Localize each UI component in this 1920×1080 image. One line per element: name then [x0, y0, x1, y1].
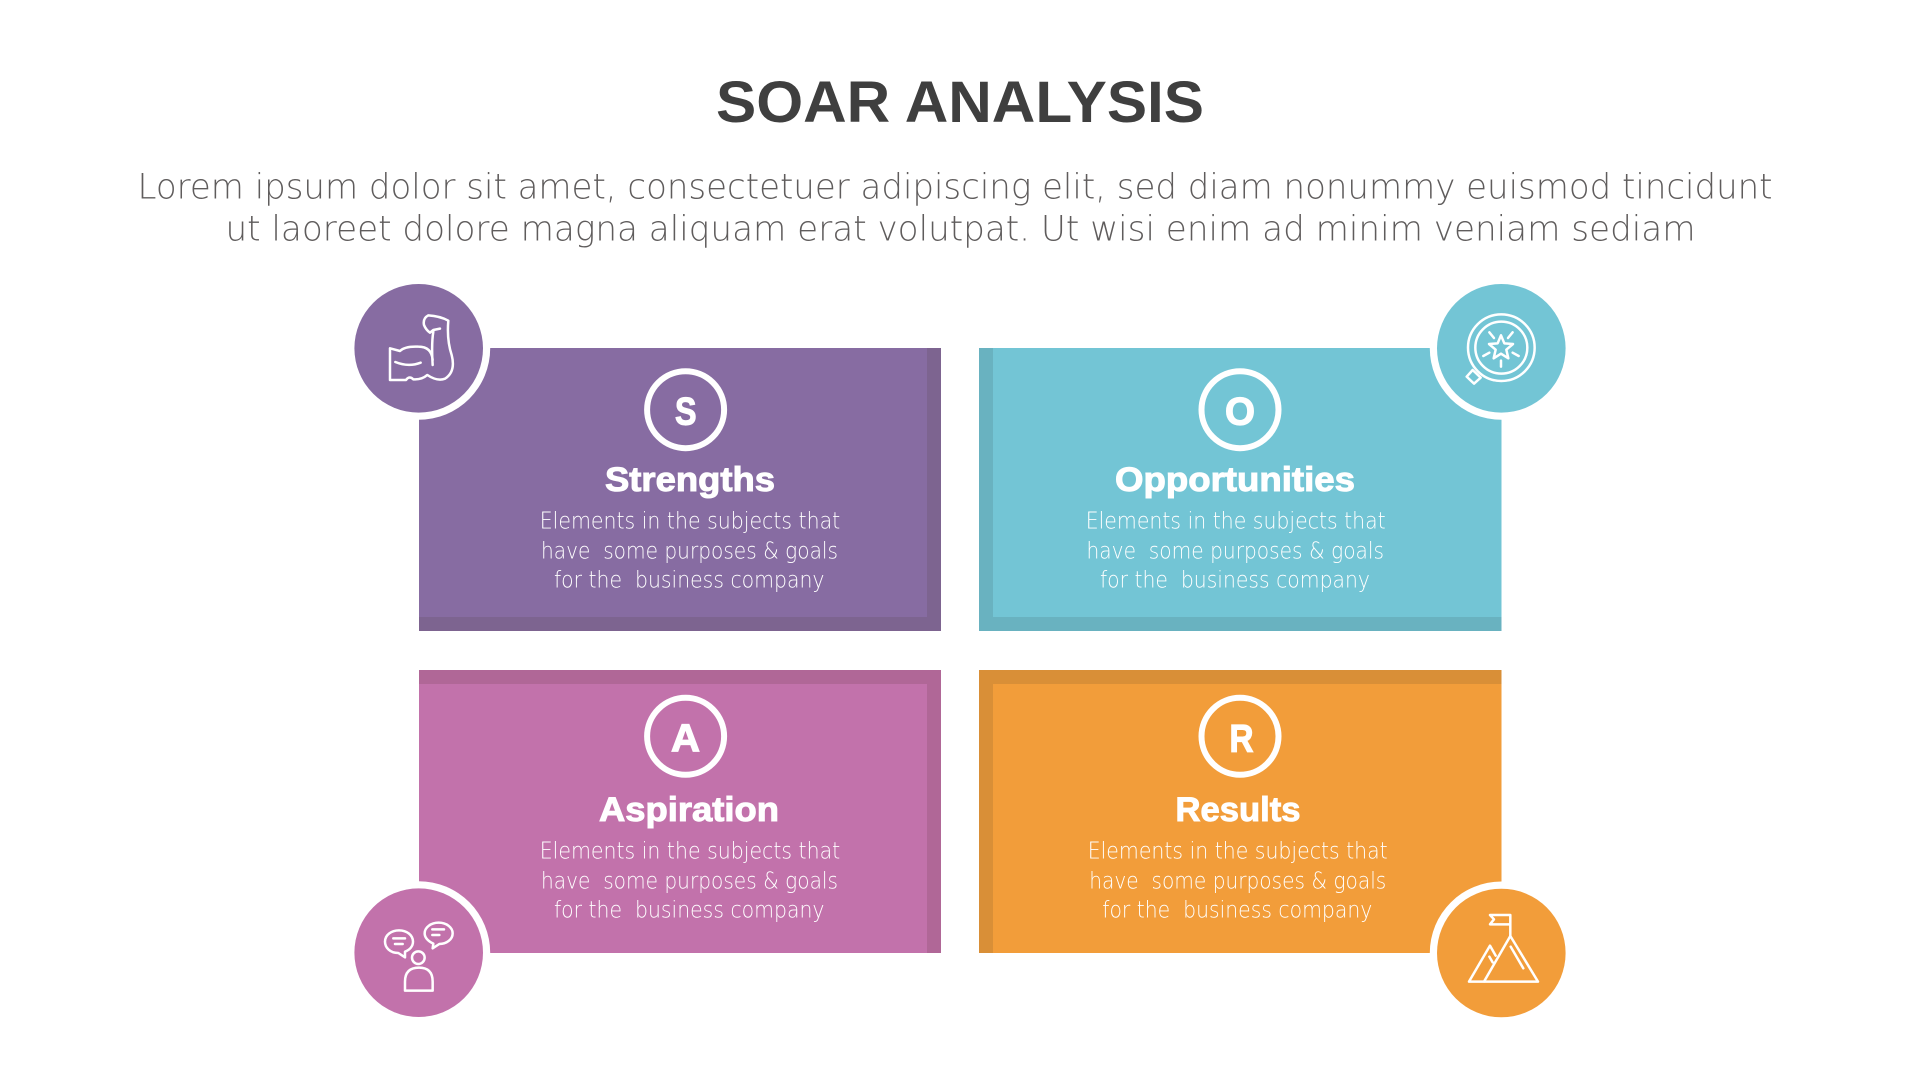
letter badge: O: O: [1225, 390, 1255, 434]
letter badge: S: [647, 371, 724, 448]
body text: opportunities: Elements in the subjects that: [1086, 506, 1386, 534]
body text: strengths: Elements in the subjects that: [540, 506, 840, 534]
panel: strengths: [419, 348, 941, 631]
icon: mountain with flag in orange circle: [1430, 882, 1573, 1024]
panel: aspiration: [419, 670, 941, 953]
heading: Strengths: Strengths: [605, 461, 775, 499]
body text: opportunities: have some purposes & goals: [1086, 536, 1384, 564]
heading: Results: Results: [1176, 791, 1300, 829]
subtitle text block: [138, 168, 1772, 250]
icon: flexed arm in purple circle: [347, 277, 490, 420]
heading: Opportunities: Opportunities: [1115, 461, 1355, 499]
letter badge: S: S: [675, 390, 696, 434]
body text: results: [1088, 836, 1388, 924]
body text: strengths: [540, 506, 840, 594]
icon: star in magnifier in teal circle: [1430, 277, 1573, 420]
letter badge: O: [1202, 371, 1278, 448]
letter badge: R: [1202, 698, 1278, 775]
body text: results: have some purposes & goals: [1089, 866, 1386, 894]
body text: strengths: have some purposes & goals: [541, 536, 838, 564]
body text: opportunities: [1086, 506, 1386, 594]
letter badge: A: [647, 698, 724, 775]
subtitle text block: ut laoreet dolore magna aliquam erat volutpat. Ut wisi enim ad minim veniam sediam: [226, 210, 1696, 250]
title: SOAR ANALYSIS: [716, 70, 1204, 135]
body text: aspiration: Elements in the subjects that: [540, 836, 840, 864]
panel: opportunities: [979, 348, 1502, 631]
letter badge: R: R: [1230, 718, 1254, 760]
body text: aspiration: [540, 836, 840, 924]
panel: results: [979, 670, 1502, 953]
body text: aspiration: have some purposes & goals: [541, 866, 838, 894]
body text: opportunities: for the business company: [1100, 566, 1370, 594]
body text: aspiration: for the business company: [554, 896, 824, 924]
icon: person with speech bubbles in pink circle: [347, 881, 490, 1024]
heading: Aspiration: Aspiration: [599, 791, 779, 829]
body text: strengths: for the business company: [554, 566, 824, 594]
body text: results: for the business company: [1102, 896, 1372, 924]
subtitle text block: Lorem ipsum dolor sit amet, consectetuer adipiscing elit, sed diam nonummy euismod tincidunt: [138, 168, 1772, 208]
body text: results: Elements in the subjects that: [1088, 836, 1388, 864]
letter badge: A: A: [671, 718, 700, 760]
